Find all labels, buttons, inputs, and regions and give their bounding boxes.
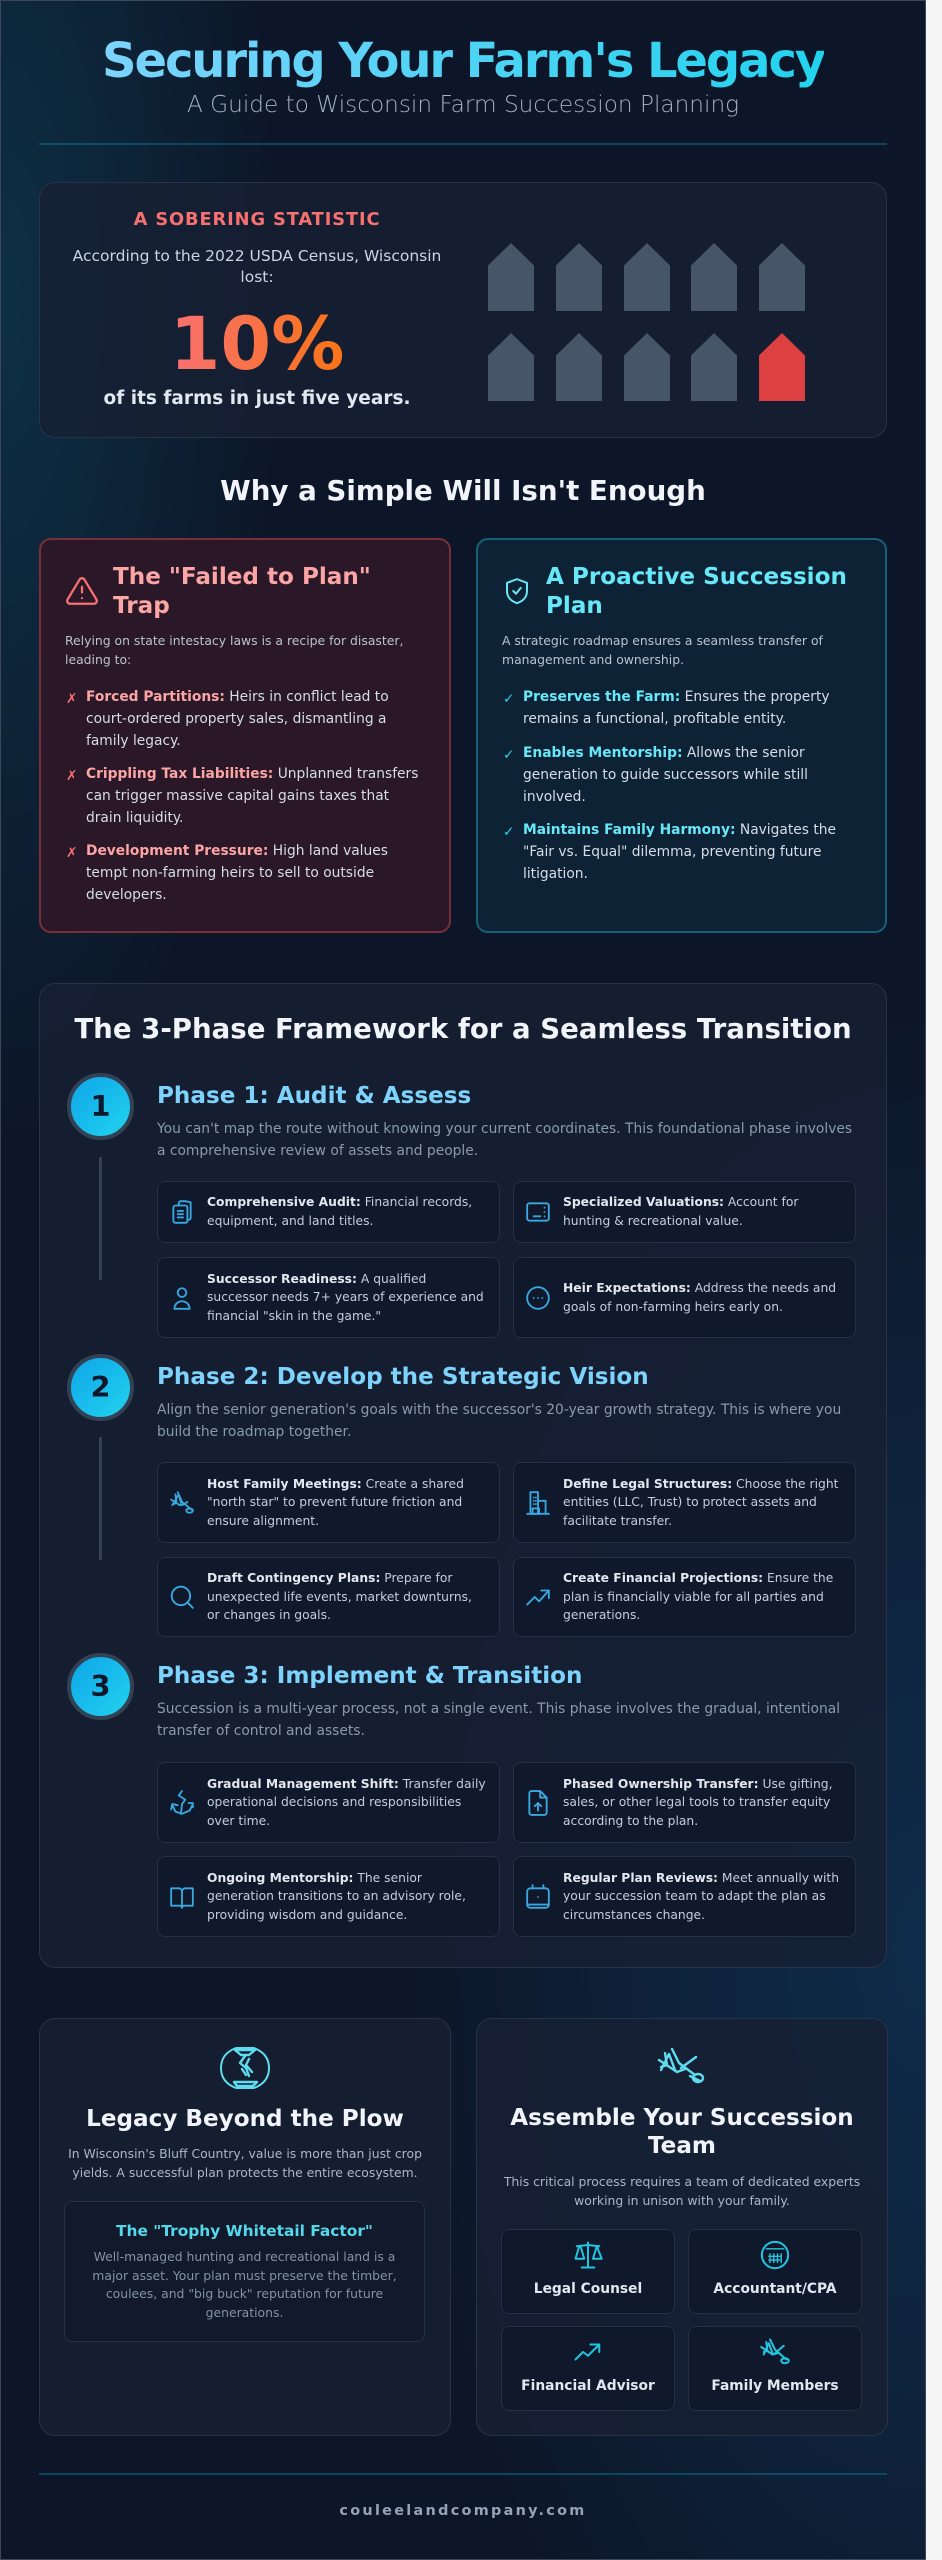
team card: family members: Family Members [711, 2378, 839, 2394]
card: specialized valuations: hunting & recreational value. [563, 1214, 743, 1228]
phase 2 number: 2 [90, 1370, 111, 1404]
big number 10%: 10% [170, 302, 344, 387]
list item: enables mentorship: involved. [523, 789, 586, 805]
phase 3 description [157, 1701, 840, 1739]
heading: proactive plan [546, 564, 847, 618]
card: successor readiness: successor needs 7+ years of experience and [207, 1290, 484, 1304]
card: define legal structures: Define Legal Structures: Choose the right [563, 1477, 838, 1491]
list item: enables mentorship: Enables Mentorship: Allows the senior [523, 745, 805, 761]
card: heir expectations [513, 1257, 856, 1338]
panel: 3-phase framework [39, 983, 887, 1968]
heading: assemble your team [510, 2105, 854, 2159]
heading: failed to plan: Trap [113, 592, 170, 618]
list item: forced partitions: Forced Partitions: Heirs in conflict lead to [86, 689, 389, 705]
card: specialized valuations: Specialized Valuations: Account for [563, 1195, 798, 1209]
legacy intro text: yields. A successful plan protects the entire ecosystem. [72, 2165, 418, 2180]
team card: financial advisor: Financial Advisor [521, 2378, 655, 2394]
list item: maintains family harmony [503, 822, 836, 882]
card: host family meetings [157, 1462, 500, 1543]
card: host family meetings: ensure alignment. [207, 1514, 319, 1528]
callout text: Well-managed hunting and recreational land is a [94, 2249, 395, 2264]
framework heading: The 3-Phase Framework for a Seamless Transition [74, 1012, 852, 1045]
list item: maintains family harmony: "Fair vs. Equal" dilemma, preventing future [523, 844, 822, 860]
list item: crippling tax liabilities [66, 766, 418, 826]
card: specialized valuations [513, 1181, 856, 1243]
intro text: A strategic roadmap ensures a seamless transfer of [502, 633, 823, 648]
card: ongoing mentorship [157, 1856, 500, 1937]
heading: legacy beyond the plow: Legacy Beyond the Plow [86, 2106, 404, 2132]
card: regular plan reviews: circumstances change. [563, 1908, 705, 1922]
team card: accountant [688, 2229, 862, 2314]
heading: assemble your team: Team [648, 2133, 716, 2159]
panel: proactive succession plan [476, 538, 887, 933]
phase 1 description [157, 1121, 852, 1159]
phase 2 title: Phase 2: Develop the Strategic Vision [157, 1364, 649, 1390]
team card: legal counsel: Legal Counsel [534, 2281, 642, 2297]
heading: failed to plan: The "Failed to Plan" [113, 564, 371, 590]
icon: team [658, 2048, 704, 2084]
intro text [65, 633, 403, 667]
phase 2 description [157, 1402, 841, 1440]
card: create financial projections: Create Financial Projections: Ensure the [563, 1571, 833, 1585]
phase 2 description: Align the senior generation's goals with the successor's 20-year growth strategy. This is where you [157, 1402, 841, 1418]
phase 1 description: You can't map the route without knowing your current coordinates. This foundational phase involves [157, 1121, 852, 1137]
team card: accountant: Accountant/CPA [713, 2281, 837, 2297]
statistic intro: lost: [240, 268, 274, 286]
card: define legal structures: entities (LLC, Trust) to protect assets and [563, 1495, 817, 1509]
card: draft contingency plans: Draft Contingency Plans: Prepare for [207, 1571, 452, 1585]
card: comprehensive audit [157, 1181, 500, 1243]
list item: crippling tax liabilities: drain liquidity. [86, 810, 183, 826]
list item: crippling tax liabilities: can trigger massive capital gains taxes that [86, 788, 389, 804]
team card: family members [688, 2326, 862, 2411]
card: ongoing mentorship: Ongoing Mentorship: The senior [207, 1871, 422, 1885]
statistic heading: A SOBERING STATISTIC [134, 209, 380, 230]
card: regular plan reviews: your succession team to adapt the plan as [563, 1889, 826, 1903]
card: define legal structures: facilitate transfer. [563, 1514, 672, 1528]
card: phased ownership transfer: according to the plan. [563, 1814, 698, 1828]
card: create financial projections: generations. [563, 1608, 640, 1622]
phase 1 [67, 1073, 856, 1338]
heading: failed to plan [113, 564, 371, 618]
card: ongoing mentorship: generation transitions to an advisory role, [207, 1889, 466, 1903]
card: gradual management shift: over time. [207, 1814, 270, 1828]
phase 2 number [67, 1354, 134, 1421]
list item: forced partitions: court-ordered property sales, dismantling a [86, 711, 386, 727]
card: heir expectations: goals of non-farming heirs early on. [563, 1300, 783, 1314]
icon: shield check [506, 578, 528, 604]
card: draft contingency plans: unexpected life events, market downturns, [207, 1590, 472, 1604]
statistic intro [72, 247, 441, 286]
list item: development pressure [66, 843, 388, 903]
phase 2 [67, 1354, 856, 1637]
callout text: coulees, and "big buck" reputation for future [106, 2286, 383, 2301]
list item: preserves the farm: remains a functional, profitable entity. [523, 711, 786, 727]
title: Securing Your Farm's Legacy [102, 33, 824, 89]
team intro text: working in unison with your family. [574, 2193, 790, 2208]
list item: development pressure: developers. [86, 887, 167, 903]
list item: maintains family harmony: ✓ [503, 824, 514, 840]
team intro text [504, 2174, 860, 2208]
list item: maintains family harmony: Maintains Family Harmony: Navigates the [523, 822, 836, 838]
icon: warning triangle [66, 577, 98, 605]
panel: assemble your succession team [476, 2018, 888, 2436]
list item: forced partitions: ✗ [66, 691, 77, 707]
panel: legacy beyond the plow [39, 2018, 451, 2436]
phase 3 description: Succession is a multi-year process, not a single event. This phase involves the gradual, intentional [157, 1701, 840, 1717]
card: phased ownership transfer: sales, or other legal tools to transfer equity [563, 1795, 830, 1809]
phase 1 number: 1 [90, 1089, 111, 1123]
legacy intro text: In Wisconsin's Bluff Country, value is more than just crop [68, 2146, 422, 2161]
callout text [92, 2249, 397, 2320]
callout text: generations. [206, 2305, 283, 2320]
list item: preserves the farm: ✓ [503, 691, 514, 707]
callout title: The "Trophy Whitetail Factor" [116, 2222, 373, 2240]
card: define legal structures [513, 1462, 856, 1543]
card: heir expectations: Heir Expectations: Address the needs and [563, 1281, 836, 1295]
phase 3 number [67, 1653, 134, 1720]
statistic conclusion: of its farms in just five years. [104, 388, 410, 409]
team card: legal counsel [501, 2229, 675, 2314]
list item: forced partitions [66, 689, 389, 749]
list item: preserves the farm [503, 689, 830, 727]
intro text: Relying on state intestacy laws is a recipe for disaster, [65, 633, 403, 648]
intro text [502, 633, 824, 667]
card: create financial projections [513, 1557, 856, 1637]
list item: enables mentorship: ✓ [503, 747, 514, 763]
callout: trophy whitetail factor [64, 2201, 425, 2342]
list item: enables mentorship: generation to guide successors while still [523, 767, 808, 783]
footer url: couleelandcompany.com [339, 2503, 587, 2519]
card: comprehensive audit: Comprehensive Audit: Financial records, [207, 1195, 472, 1209]
phase 1 number [67, 1073, 134, 1140]
phase 3 number: 3 [90, 1669, 111, 1703]
phase 3 title: Phase 3: Implement & Transition [157, 1663, 582, 1689]
intro text: management and ownership. [502, 652, 684, 667]
card: draft contingency plans [157, 1557, 500, 1637]
intro text: leading to: [65, 652, 131, 667]
chart: farm houses, one in ten red [488, 243, 805, 401]
list item: preserves the farm: Preserves the Farm: Ensures the property [523, 689, 830, 705]
card: host family meetings: Host Family Meetings: Create a shared [207, 1477, 464, 1491]
card: gradual management shift [157, 1762, 500, 1843]
heading: proactive plan: A Proactive Succession [546, 564, 847, 590]
panel: sobering statistic [39, 182, 887, 438]
section heading: Why a Simple Will Isn't Enough [220, 474, 706, 507]
list item: development pressure: ✗ [66, 845, 77, 861]
list item: crippling tax liabilities: ✗ [66, 768, 77, 784]
phase 1 title: Phase 1: Audit & Assess [157, 1083, 471, 1109]
callout text: major asset. Your plan must preserve the timber, [92, 2268, 397, 2283]
phase 2 description: build the roadmap together. [157, 1424, 351, 1440]
icon: legacy badge [220, 2047, 270, 2089]
phase 3 description: transfer of control and assets. [157, 1723, 365, 1739]
card: successor readiness [157, 1257, 500, 1338]
list item: enables mentorship [503, 745, 808, 805]
team intro text: This critical process requires a team of dedicated experts [504, 2174, 860, 2189]
card: create financial projections: plan is financially viable for all parties and [563, 1590, 824, 1604]
card: successor readiness: financial "skin in the game." [207, 1309, 381, 1323]
list item: development pressure: tempt non-farming heirs to sell to outside [86, 865, 374, 881]
phase 3 [67, 1653, 856, 1937]
card: host family meetings: "north star" to prevent future friction and [207, 1495, 462, 1509]
card: draft contingency plans: or changes in goals. [207, 1608, 331, 1622]
card: successor readiness: Successor Readiness: A qualified [207, 1272, 426, 1286]
subtitle: A Guide to Wisconsin Farm Succession Planning [187, 91, 739, 118]
card: regular plan reviews [513, 1856, 856, 1937]
card: comprehensive audit: equipment, and land titles. [207, 1214, 373, 1228]
list item: maintains family harmony: litigation. [523, 866, 588, 882]
team card: financial advisor [501, 2326, 675, 2411]
legacy intro text [68, 2146, 422, 2180]
list item: development pressure: Development Pressure: High land values [86, 843, 388, 859]
phase 1 description: a comprehensive review of assets and people. [157, 1143, 478, 1159]
card: phased ownership transfer: Phased Ownership Transfer: Use gifting, [563, 1777, 833, 1791]
statistic intro: According to the 2022 USDA Census, Wisconsin [73, 247, 441, 265]
list item: forced partitions: family legacy. [86, 733, 181, 749]
card: gradual management shift: operational decisions and responsibilities [207, 1795, 461, 1809]
card: regular plan reviews: Regular Plan Reviews: Meet annually with [563, 1871, 839, 1885]
panel: failed to plan trap [39, 538, 451, 933]
heading: proactive plan: Plan [546, 592, 603, 618]
list item: crippling tax liabilities: Crippling Tax Liabilities: Unplanned transfers [86, 766, 418, 782]
card: phased ownership transfer [513, 1762, 856, 1843]
card: ongoing mentorship: providing wisdom and guidance. [207, 1908, 407, 1922]
heading: assemble your team: Assemble Your Succession [510, 2105, 854, 2131]
card: gradual management shift: Gradual Management Shift: Transfer daily [207, 1777, 486, 1791]
